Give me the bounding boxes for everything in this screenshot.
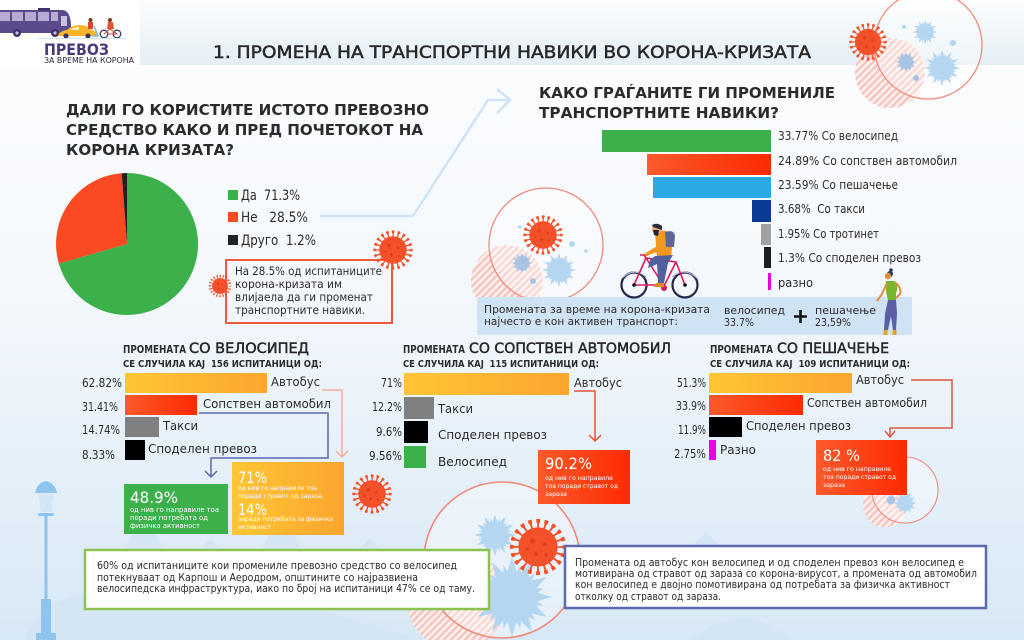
note: green box about municipalities: 60% од испитаниците кои промениле превозно средство со велосипед [97, 559, 457, 572]
callout: 71 and 14 percent: заради потребата за физичка [238, 516, 333, 523]
pie legend [228, 188, 316, 249]
decoration: top-right virus circle [851, 0, 982, 108]
decoration: bottom virus circle [407, 482, 580, 640]
callout: 28.5 percent changed habits [226, 260, 392, 323]
callout: 90.2 percent: 90.2% [545, 454, 592, 473]
callout: 82 percent: зараза [823, 482, 845, 489]
panel: change to own car [369, 341, 671, 504]
pie legend: Да 71.3% [241, 188, 300, 204]
bars [125, 373, 267, 460]
icon: large virus [375, 232, 411, 268]
bar chart: habit changes: 3.68% Со такси [778, 202, 865, 216]
heading: СО СОПСТВЕН АВТОМОБИЛ [469, 341, 671, 357]
bar chart: habit changes: 1.95% Со тротинет [778, 227, 879, 241]
percentages and labels: 8.33% [82, 448, 115, 462]
percentages and labels: 9.6% [376, 425, 402, 439]
percentages and labels: 31.41% [82, 400, 118, 414]
background city silhouette [25, 505, 790, 640]
arrow: bus to red box [885, 380, 952, 437]
bar chart: habit changes: 33.77% Со велосипед [778, 129, 898, 143]
decoration: right-bottom virus circle [863, 457, 938, 527]
band: active transport summary: Промената за време на корона-кризата [484, 303, 710, 316]
callout: 71 and 14 percent [232, 462, 344, 535]
percentages and labels: 51.3% [677, 376, 706, 390]
heading: question about same transport: ДАЛИ ГО КОРИСТИТЕ ИСТОТО ПРЕВОЗНО [66, 101, 429, 119]
heading: question about same transport: КОРОНА КРИЗАТА? [66, 141, 234, 159]
icon: scooter rider [88, 18, 98, 36]
bar chart: habit changes: 23.59% Со пешачење [778, 178, 898, 192]
heading [710, 341, 910, 370]
percentages and labels: 62.82% [82, 376, 122, 390]
icon: cyclist [621, 224, 698, 298]
callout: 71 and 14 percent: активност [238, 524, 272, 531]
percentages and labels: Автобус [856, 373, 904, 387]
percentages and labels: 33.9% [676, 399, 706, 413]
band: active transport summary: пешачење [815, 304, 876, 317]
percentages and labels: Автобус [271, 375, 320, 389]
note: blue box about motivation: отколку од стравот од зараза. [575, 590, 721, 603]
heading: ПРОМЕНАТА [403, 344, 466, 356]
percentages and labels: Споделен превоз [438, 428, 547, 442]
road line [38, 38, 126, 39]
icon: yellow car [58, 25, 97, 39]
percentages and labels: Сопствен автомобил [807, 396, 927, 410]
percentages and labels: 71% [381, 376, 402, 390]
decoration: street lamp [35, 481, 57, 640]
percentages and labels [369, 376, 622, 469]
logo subtitle: ЗА ВРЕМЕ НА КОРОНА [44, 56, 135, 65]
percentages and labels: Велосипед [438, 455, 507, 469]
bars [404, 373, 569, 468]
band: active transport summary: 23,59% [815, 316, 851, 329]
note: green box about municipalities: велосипедска инфраструктура, иако по број на испитаници 47% се од таму. [97, 582, 475, 595]
heading [403, 341, 671, 370]
callout: 48.9 percent: физичка активност [130, 522, 200, 530]
callout: 71 and 14 percent: од нив го направиле тоа [238, 485, 317, 492]
bar chart: habit changes: 1.3% Со споделен превоз [778, 251, 921, 265]
note: blue box about motivation: кон велосипед е двојно помотивирана од потребата за физичка активност [575, 578, 951, 591]
arrow: bus to yellow box [322, 390, 348, 457]
bars [709, 373, 852, 460]
icon: bus [0, 8, 71, 37]
heading: how citizens changed: ТРАНСПОРТНИТЕ НАВИКИ? [539, 104, 779, 122]
note: blue box about motivation [565, 546, 986, 608]
heading: ПРОМЕНАТА [123, 344, 187, 356]
icon: cyclist [100, 18, 121, 38]
arrow: from pie to bars [320, 89, 510, 216]
bar chart: habit changes: 24.89% Со сопствен автомобил [778, 154, 957, 168]
heading: how citizens changed: КАКО ГРАЃАНИТЕ ГИ ПРОМЕНИЛЕ [539, 83, 835, 102]
callout: 48.9 percent: од нив го направиле тоа [130, 506, 219, 514]
panel: change to walking [674, 341, 952, 495]
callout: 28.5 percent changed habits: На 28.5% од испитаниците [235, 264, 382, 278]
callout: 82 percent: 82 % [823, 446, 860, 465]
callout: 90.2 percent: тоа поради стравот од [545, 483, 618, 490]
percentages and labels: Разно [720, 443, 756, 457]
decoration: middle virus circle [471, 187, 604, 297]
percentages and labels: 2.75% [674, 447, 706, 461]
callout: 28.5 percent changed habits: влијаела да ги променат [235, 290, 373, 304]
percentages and labels: 14.74% [82, 423, 120, 437]
heading: ПРОМЕНАТА [710, 344, 774, 356]
callout: 82 percent: од нив го направиле [823, 466, 891, 473]
percentages and labels: Такси [437, 402, 473, 416]
percentages and labels: 12.2% [372, 400, 402, 414]
heading [123, 341, 322, 370]
percentages and labels: Споделен превоз [148, 442, 257, 456]
percentages and labels: Автобус [574, 376, 622, 390]
logo wordmark: ПРЕВОЗ [44, 40, 109, 59]
percentages and labels: 9.56% [369, 449, 402, 463]
callout: 71 and 14 percent: 71% [238, 468, 267, 487]
heading: СЕ СЛУЧИЛА КАЈ 156 ИСПИТАНИЦИ ОД: [123, 359, 322, 370]
heading: СО ВЕЛОСИПЕД [189, 341, 309, 357]
callout: 71 and 14 percent: поради стравот од зараза [238, 493, 322, 500]
callout: 90.2 percent: зараза [545, 491, 567, 498]
heading: question about same transport [66, 101, 429, 159]
title: 1. ПРОМЕНА НА ТРАНСПОРТНИ НАВИКИ ВО КОРОНА-КРИЗАТА [213, 43, 811, 63]
callout: 48.9 percent: 48.9% [130, 488, 178, 507]
heading: question about same transport: СРЕДСТВО КАКО И ПРЕД ПОЧЕТОКОТ НА [66, 121, 423, 139]
percentages and labels: Сопствен автомобил [203, 397, 331, 411]
heading: СО ПЕШАЧЕЊЕ [777, 341, 889, 357]
icon: virus beside bicycle panel [354, 476, 390, 512]
band: active transport summary [477, 297, 912, 335]
icon: small virus [210, 276, 230, 296]
callout: 48.9 percent: поради потребата од [130, 514, 208, 522]
note: blue box about motivation: Промената од автобус кон велосипед и од споделен превоз кон велосипед е [575, 556, 964, 569]
callout: 71 and 14 percent: 14% [238, 500, 267, 519]
heading: СЕ СЛУЧИЛА КАЈ 115 ИСПИТАНИЦИ ОД: [403, 359, 599, 370]
callout: 28.5 percent changed habits: корона-кризата им [235, 277, 342, 291]
header band [140, 0, 1024, 65]
band: active transport summary: велосипед [724, 304, 785, 317]
heading: how citizens changed [539, 83, 835, 122]
band: active transport summary: најчесто е кон активен транспорт: [484, 315, 678, 328]
heading: СЕ СЛУЧИЛА КАЈ 109 ИСПИТАНИЦИ ОД: [710, 359, 910, 370]
callout: 82 percent: тоа поради стравот од [823, 474, 896, 481]
callout: 82 percent [816, 440, 907, 495]
band: active transport summary: 33.7% [724, 316, 754, 329]
percentages and labels: Споделен превоз [746, 419, 851, 433]
icon: walking woman [877, 268, 900, 335]
pie legend: Не 28.5% [241, 210, 308, 226]
pie chart [56, 173, 198, 315]
bar chart: habit changes: разно [778, 276, 813, 290]
icon: plus [794, 310, 807, 323]
note: green box about municipalities: потекнуваат од Карпош и Аеродром, општините со најразвиена [97, 571, 418, 584]
percentages and labels [674, 373, 927, 461]
icon: bottom virus [512, 521, 564, 573]
logo [0, 0, 140, 65]
arrow: bus to red box [574, 391, 601, 441]
panel: change to bicycle [82, 341, 348, 535]
callout: 48.9 percent [124, 484, 228, 534]
percentages and labels: 11.9% [678, 423, 706, 437]
callout: 90.2 percent [538, 450, 630, 504]
percentages and labels [82, 375, 331, 462]
callout: 90.2 percent: од нив го направиле [545, 475, 613, 482]
percentages and labels: Такси [162, 419, 198, 433]
arrow: car to green box [199, 413, 328, 477]
bar chart: habit changes [602, 129, 957, 290]
pie legend: Друго 1.2% [241, 233, 316, 249]
note: green box about municipalities [85, 550, 489, 609]
callout: 28.5 percent changed habits: транспортните навики. [235, 303, 365, 317]
